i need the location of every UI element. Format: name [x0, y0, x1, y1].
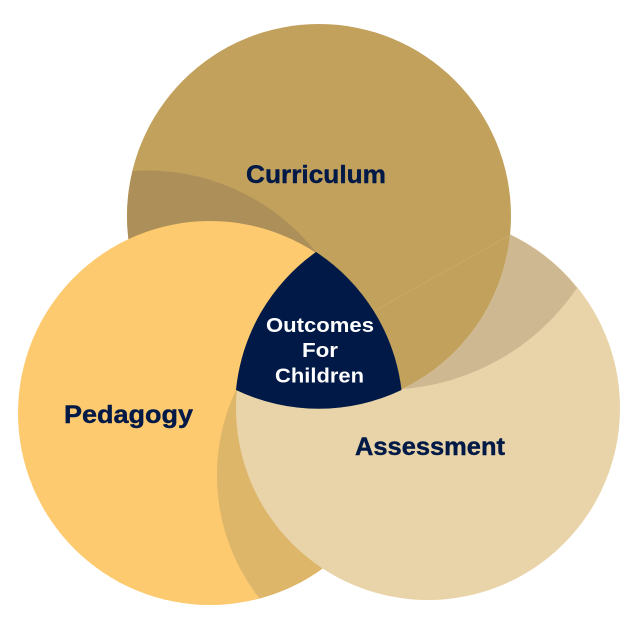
label: outcomes for children: Outcomes: [266, 315, 374, 337]
center intersection: outcomes: [236, 252, 402, 409]
curriculum shaded overlap: [127, 171, 316, 300]
pedagogy shaded overlap: [217, 390, 360, 598]
label: outcomes for children: [266, 315, 374, 388]
circle: pedagogy: [18, 221, 402, 605]
label: pedagogy: Pedagogy: [64, 401, 193, 429]
circle: assessment: [236, 216, 620, 600]
label: curriculum: Curriculum: [246, 161, 386, 189]
label: assessment: Assessment: [355, 433, 506, 461]
label: outcomes for children: For: [302, 340, 338, 362]
circle: curriculum: [127, 24, 511, 408]
assessment shaded overlap: [402, 234, 577, 389]
label: outcomes for children: Children: [275, 366, 364, 388]
